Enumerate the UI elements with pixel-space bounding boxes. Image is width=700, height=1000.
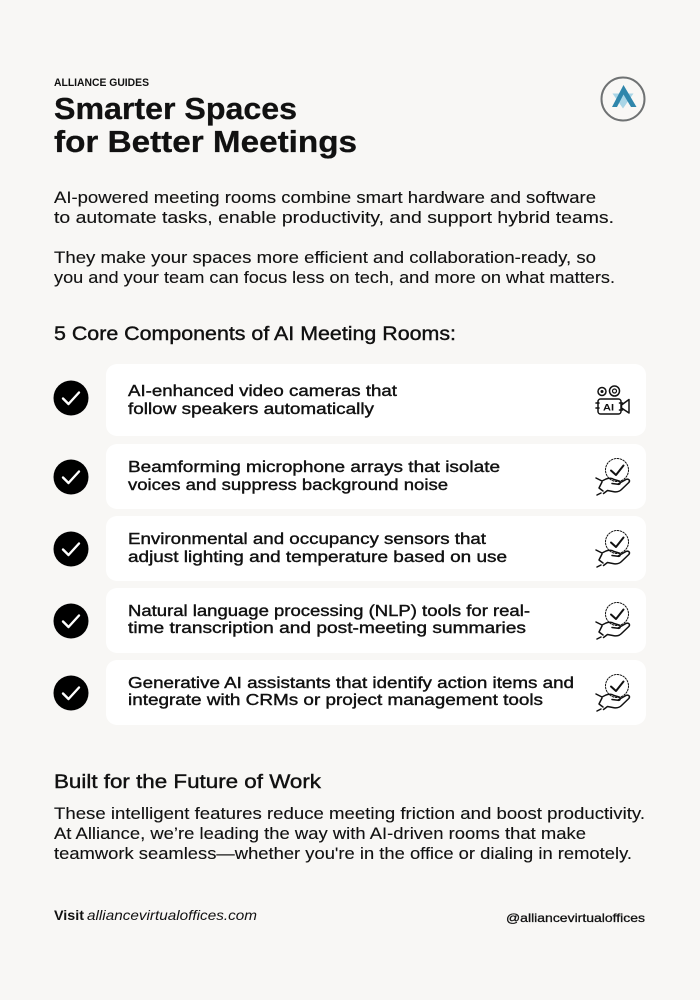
- card 3 text: [128, 531, 507, 566]
- intro paragraph two: They make your spaces more efficient and collaboration-ready, so: [54, 249, 596, 267]
- icon: hand with check: [596, 530, 629, 567]
- footer: website: Visit: [54, 907, 84, 923]
- check badge 3: [54, 532, 88, 566]
- check badge 2: [54, 460, 88, 494]
- intro paragraph two: you and your team can focus less on tech, and more on what matters.: [54, 269, 615, 287]
- closing paragraph: These intelligent features reduce meeting friction and boost productivity.: [54, 805, 645, 823]
- card 4: [106, 588, 646, 653]
- heading: core components: 5 Core Components of AI Meeting Rooms:: [54, 324, 456, 345]
- icon: hand with check: [596, 458, 629, 495]
- icon: AI video camera: AI: [603, 402, 614, 412]
- intro paragraph two: [54, 249, 615, 287]
- component row 5: generative AI: [54, 660, 646, 725]
- icon: hand with check: [596, 674, 629, 711]
- closing paragraph: [54, 805, 645, 863]
- check badge 4: [54, 604, 88, 638]
- footer: website: alliancevirtualoffices.com: [87, 907, 257, 923]
- icon: hand with check: [596, 602, 629, 639]
- intro paragraph one: [54, 189, 614, 227]
- heading: future of work: Built for the Future of Work: [54, 772, 322, 793]
- footer: social handle: @alliancevirtualoffices: [506, 911, 645, 925]
- title: for Better Meetings: [54, 124, 357, 159]
- card 1 text: [128, 383, 398, 418]
- card 2: [106, 444, 646, 509]
- card 5: [106, 660, 646, 725]
- intro paragraph one: AI-powered meeting rooms combine smart hardware and software: [54, 189, 596, 207]
- closing paragraph: At Alliance, we’re leading the way with AI-driven rooms that make: [54, 825, 586, 843]
- card 4 text: Natural language processing (NLP) tools for real-: [128, 603, 530, 620]
- card 5 text: Generative AI assistants that identify action items and: [128, 675, 574, 692]
- card 1: [106, 364, 646, 436]
- closing paragraph: teamwork seamless—whether you're in the office or dialing in remotely.: [54, 845, 632, 863]
- check badge 1: [54, 380, 88, 416]
- eyebrow: Alliance Guides: ALLIANCE GUIDES: [54, 77, 149, 89]
- title: [54, 91, 357, 159]
- card 3 text: adjust lighting and temperature based on use: [128, 549, 507, 566]
- component row 3: sensors: [54, 516, 646, 581]
- card 3: [106, 516, 646, 581]
- icon: Alliance logo: [602, 78, 644, 120]
- check badge 5: [54, 676, 88, 710]
- card 5 text: [128, 675, 574, 709]
- card 1 text: AI-enhanced video cameras that: [128, 383, 398, 400]
- title: Smarter Spaces: [54, 91, 297, 126]
- card 4 text: time transcription and post-meeting summaries: [128, 620, 526, 637]
- icon: AI video camera: [596, 386, 629, 414]
- component row 4: NLP tools: [54, 588, 646, 653]
- card 1 text: follow speakers automatically: [128, 401, 374, 418]
- card 3 text: Environmental and occupancy sensors that: [128, 531, 487, 548]
- card 5 text: integrate with CRMs or project management tools: [128, 692, 543, 709]
- card 2 text: voices and suppress background noise: [128, 477, 448, 494]
- card 2 text: Beamforming microphone arrays that isolate: [128, 459, 500, 476]
- component row 2: microphones: [54, 444, 646, 509]
- intro paragraph one: to automate tasks, enable productivity, and support hybrid teams.: [54, 209, 614, 227]
- card 4 text: [128, 603, 530, 637]
- component row 1: video cameras: [54, 364, 646, 436]
- card 2 text: [128, 459, 500, 494]
